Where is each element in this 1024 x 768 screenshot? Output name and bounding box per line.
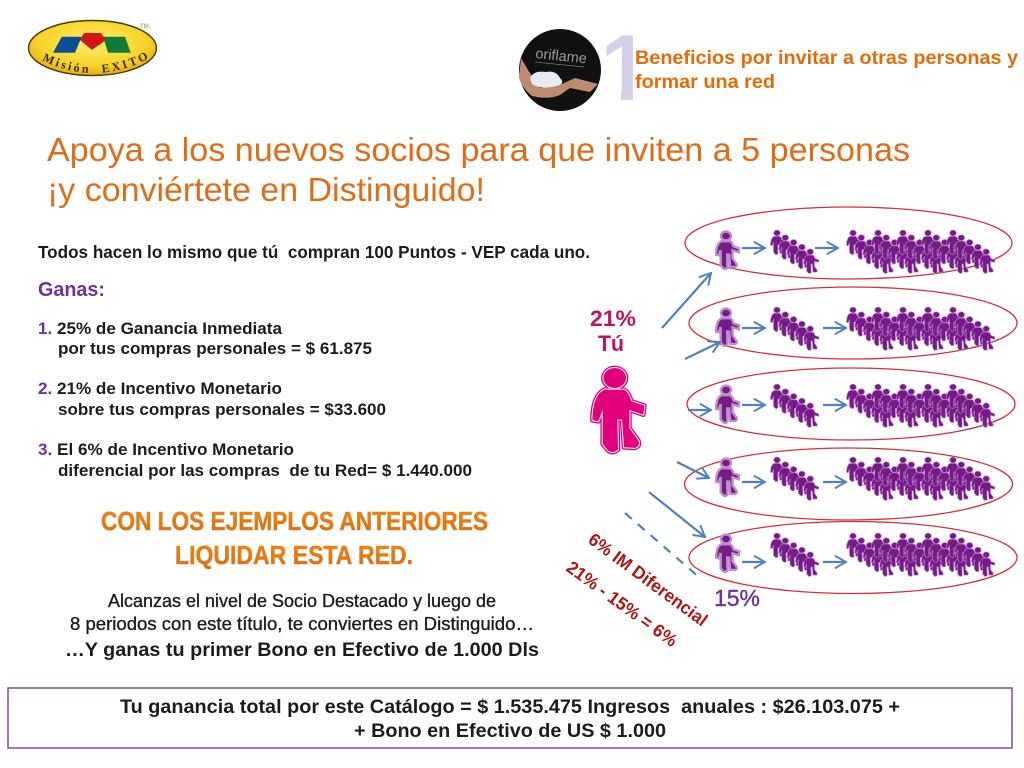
earnings list: 2. 21% de Incentivo Monetario xyxy=(38,379,282,398)
orange call to action: LIQUIDAR ESTA RED. xyxy=(175,540,413,570)
total box: + Bono en Efectivo de US $ 1.000 xyxy=(354,720,666,742)
icon: pink person xyxy=(592,368,644,452)
orange call to action: CON LOS EJEMPLOS ANTERIORES xyxy=(101,506,488,536)
arrows from you to rows xyxy=(649,273,720,537)
main title: ¡y conviértete en Distinguido! xyxy=(47,171,485,208)
main title: Apoya a los nuevos socios para que inviten a 5 personas xyxy=(47,131,910,168)
orange call to action xyxy=(101,506,488,570)
row 3 xyxy=(687,368,1015,440)
main title xyxy=(47,131,910,208)
differential labels: 6% IM Diferencial xyxy=(585,529,711,630)
section heading xyxy=(635,47,1018,93)
label: 21% Tú: Tú xyxy=(598,331,624,356)
logo: Misión EXITO xyxy=(28,20,158,76)
network rows xyxy=(684,207,1017,594)
earnings list: 1. 25% de Ganancia Inmediata xyxy=(38,319,283,338)
label: 21% Tú: 21% xyxy=(590,306,636,331)
earnings list xyxy=(38,319,472,480)
section heading: formar una red xyxy=(635,71,775,93)
logo: Misión EXITO: TM. xyxy=(140,24,151,30)
closing text: 8 periodos con este título, te conviertes en Distinguido… xyxy=(70,614,534,634)
intro text: Todos hacen lo mismo que tú compran 100 Puntos - VEP cada uno. xyxy=(38,242,590,262)
logo: Misión EXITO: Misión EXITO xyxy=(42,53,147,73)
section heading: Beneficios por invitar a otras personas y xyxy=(635,47,1018,69)
row 4 xyxy=(684,448,1012,520)
dashed differential line xyxy=(625,513,700,578)
row 5 xyxy=(689,522,1017,594)
closing text: …Y ganas tu primer Bono en Efectivo de 1.000 Dls xyxy=(65,639,539,661)
heading: Ganas: Ganas: xyxy=(38,279,105,301)
total box xyxy=(8,688,1012,748)
earnings list: diferencial por las compras de tu Red= $ 1.440.000 xyxy=(58,461,472,480)
closing text: Alcanzas el nivel de Socio Destacado y luego de xyxy=(108,591,496,611)
closing text xyxy=(65,591,539,661)
earnings list: por tus compras personales = $ 61.875 xyxy=(58,339,372,358)
differential labels: 21% - 15% = 6% xyxy=(563,557,681,651)
label: 21% Tú xyxy=(590,306,636,356)
row 2 xyxy=(689,287,1017,359)
photo: oriflame hands xyxy=(519,29,601,111)
photo: oriflame hands: oriflame xyxy=(535,46,588,67)
label: 15%: 15% xyxy=(714,585,760,611)
total box: Tu ganancia total por este Catálogo = $ 1.535.475 Ingresos anuales : $26.103.075 + xyxy=(120,696,900,718)
earnings list: sobre tus compras personales = $33.600 xyxy=(58,400,386,419)
row 1 xyxy=(685,207,1012,279)
big number 1: 1 xyxy=(600,15,652,120)
earnings list: 3. El 6% de Incentivo Monetario xyxy=(38,440,294,459)
